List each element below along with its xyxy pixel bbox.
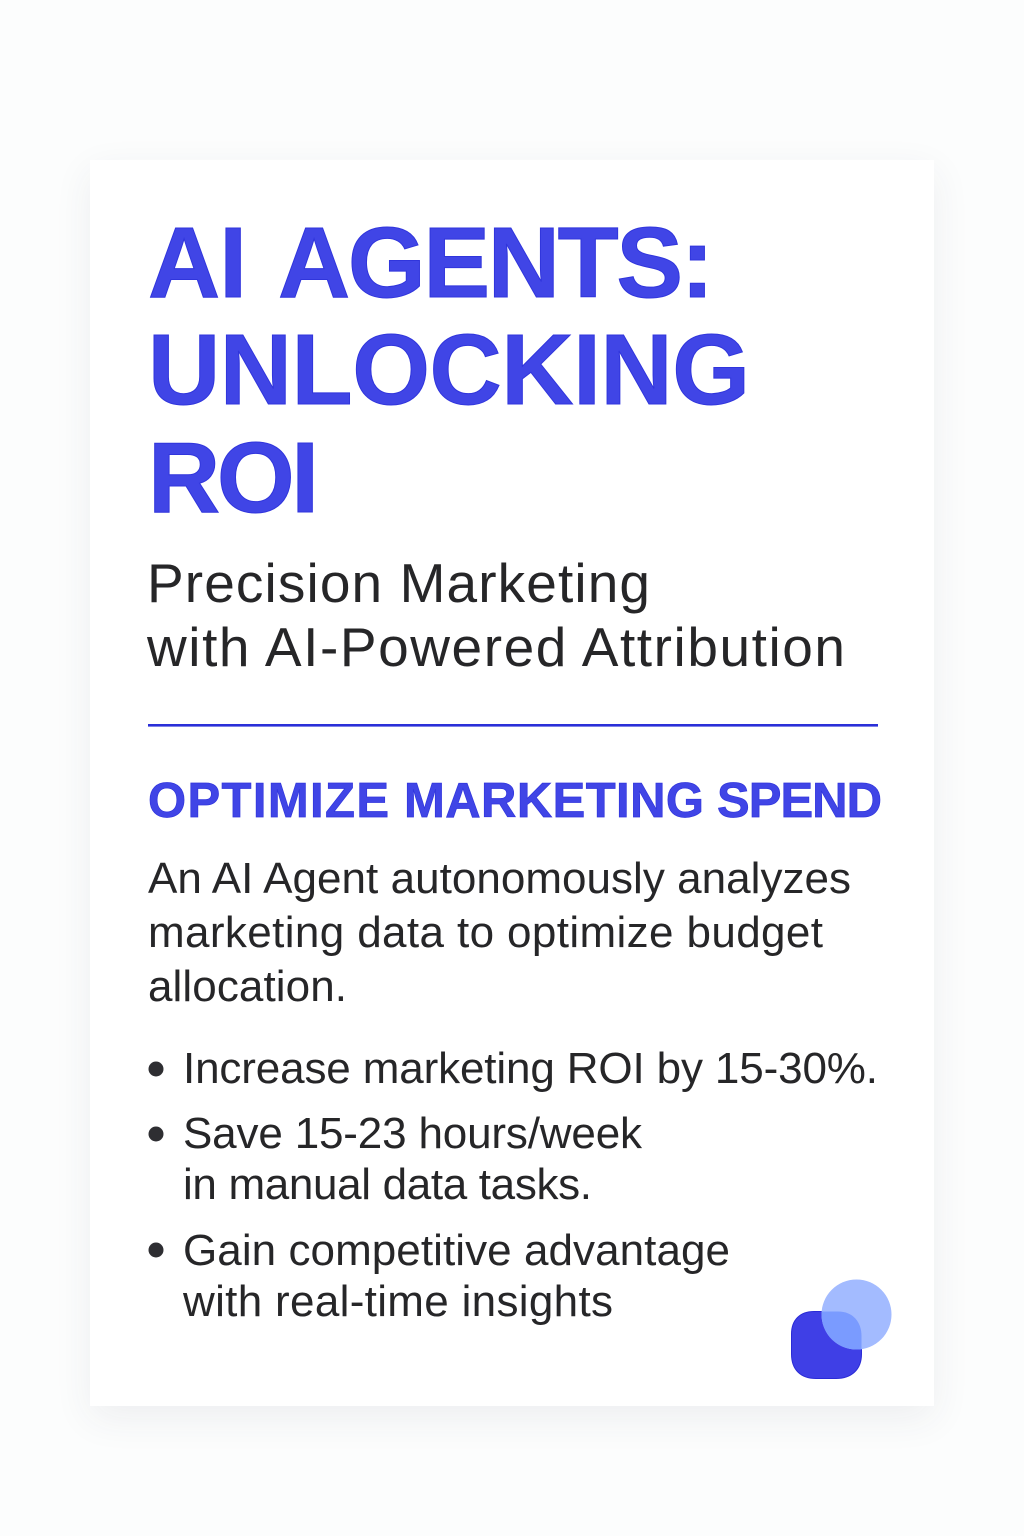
title: ROI (148, 422, 319, 534)
bullet: save hours: in manual data tasks. (183, 1160, 592, 1209)
divider line (148, 724, 878, 727)
subtitle: Precision Marketing (147, 552, 650, 614)
body paragraph: allocation. (148, 962, 347, 1011)
section heading: SPEND (717, 774, 882, 828)
title (148, 207, 750, 534)
body paragraph: An AI Agent autonomously analyzes (148, 854, 851, 903)
section heading: OPTIMIZE (148, 774, 389, 828)
bullet: competitive advantage: with real-time insights (182, 1277, 613, 1326)
section heading (148, 774, 882, 828)
title: UNLOCKING (148, 314, 750, 426)
title: AGENTS: (278, 207, 714, 319)
title: AI (148, 207, 247, 319)
bullet: save hours: Save 15-23 hours/week (183, 1109, 643, 1158)
bullet: save hours (148, 1109, 643, 1209)
bullet list (148, 1044, 878, 1326)
icon: overlapping logo shapes (792, 1280, 892, 1378)
section heading: MARKETING (404, 774, 704, 828)
body paragraph (148, 854, 851, 1011)
bullet: competitive advantage (148, 1226, 730, 1326)
subtitle (146, 552, 845, 678)
body paragraph: marketing data to optimize budget (148, 908, 823, 957)
subtitle: with AI-Powered Attribution (146, 616, 845, 678)
panel: white card (90, 160, 934, 1406)
bullet: competitive advantage: Gain competitive advantage (183, 1226, 730, 1275)
bullet: increase ROI: Increase marketing ROI by 15-30%. (183, 1044, 878, 1093)
